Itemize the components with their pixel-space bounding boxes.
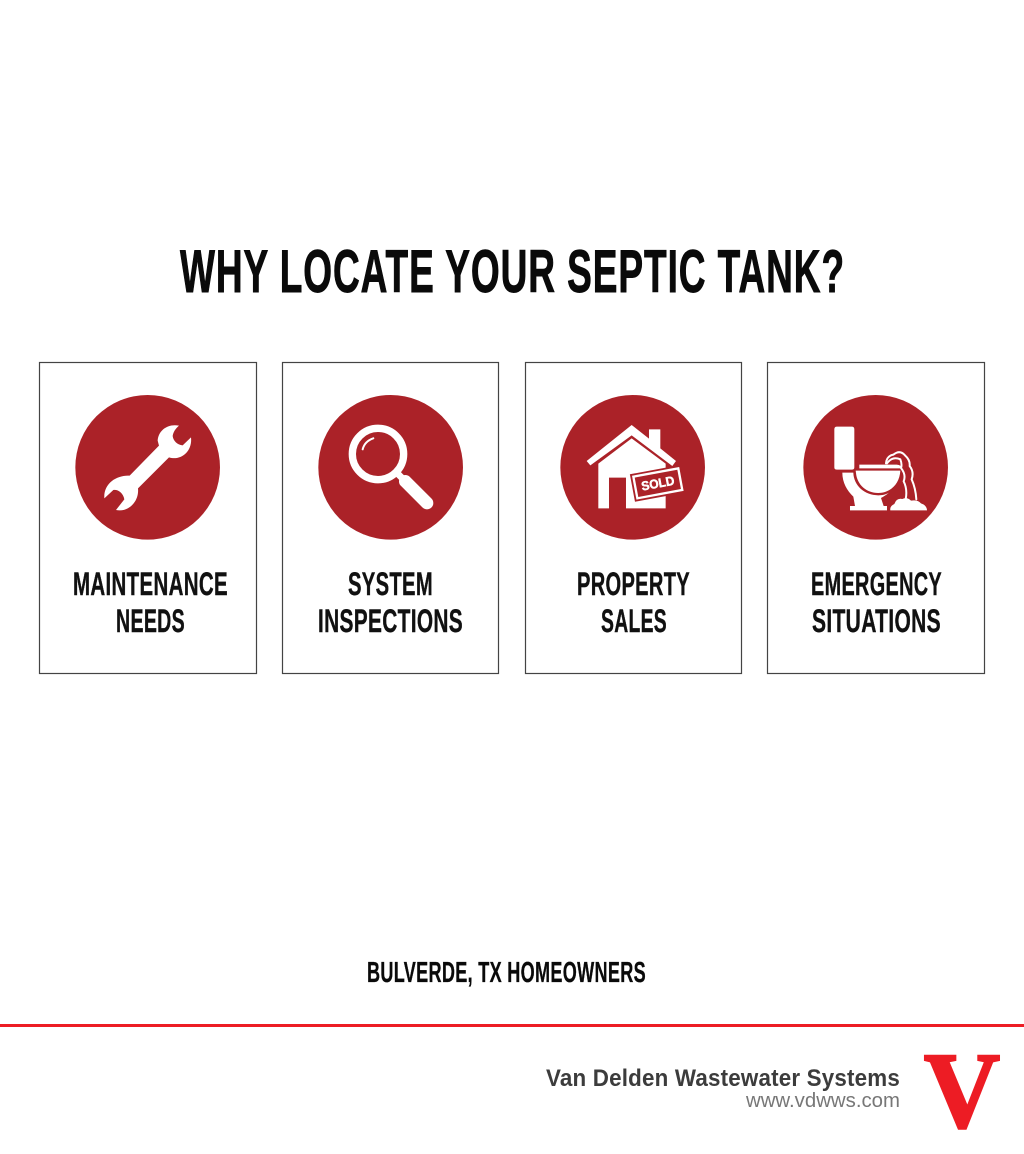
label: property sales: PROPERTY [577, 566, 690, 602]
icon: magnifying glass [318, 395, 463, 540]
footer website: www.vdwws.com [745, 1090, 900, 1112]
panel: system inspections [282, 362, 498, 674]
icon: house with sold sign: SOLD [640, 474, 676, 494]
panel: emergency situations [768, 362, 984, 674]
label: maintenance needs [73, 566, 228, 639]
label: emergency situations: SITUATIONS [812, 603, 941, 639]
label: property sales [577, 566, 690, 639]
panel: maintenance needs [40, 362, 256, 674]
footer company name: Van Delden Wastewater Systems [546, 1065, 900, 1092]
icon: house with sold sign [560, 395, 705, 540]
label: emergency situations: EMERGENCY [811, 566, 942, 602]
icon: overflowing toilet [803, 395, 948, 540]
label: system inspections [318, 566, 463, 639]
label: maintenance needs: NEEDS [116, 603, 185, 639]
logo: red V: V [924, 1032, 1000, 1151]
label: property sales: SALES [601, 603, 667, 639]
label: maintenance needs: MAINTENANCE [73, 566, 228, 602]
label: system inspections: SYSTEM [348, 566, 433, 602]
label: emergency situations [811, 566, 942, 639]
label: system inspections: INSPECTIONS [318, 603, 463, 639]
subtitle: BULVERDE, TX HOMEOWNERS [367, 957, 646, 989]
panel: property sales [526, 362, 742, 674]
icon: wrench [75, 395, 220, 540]
